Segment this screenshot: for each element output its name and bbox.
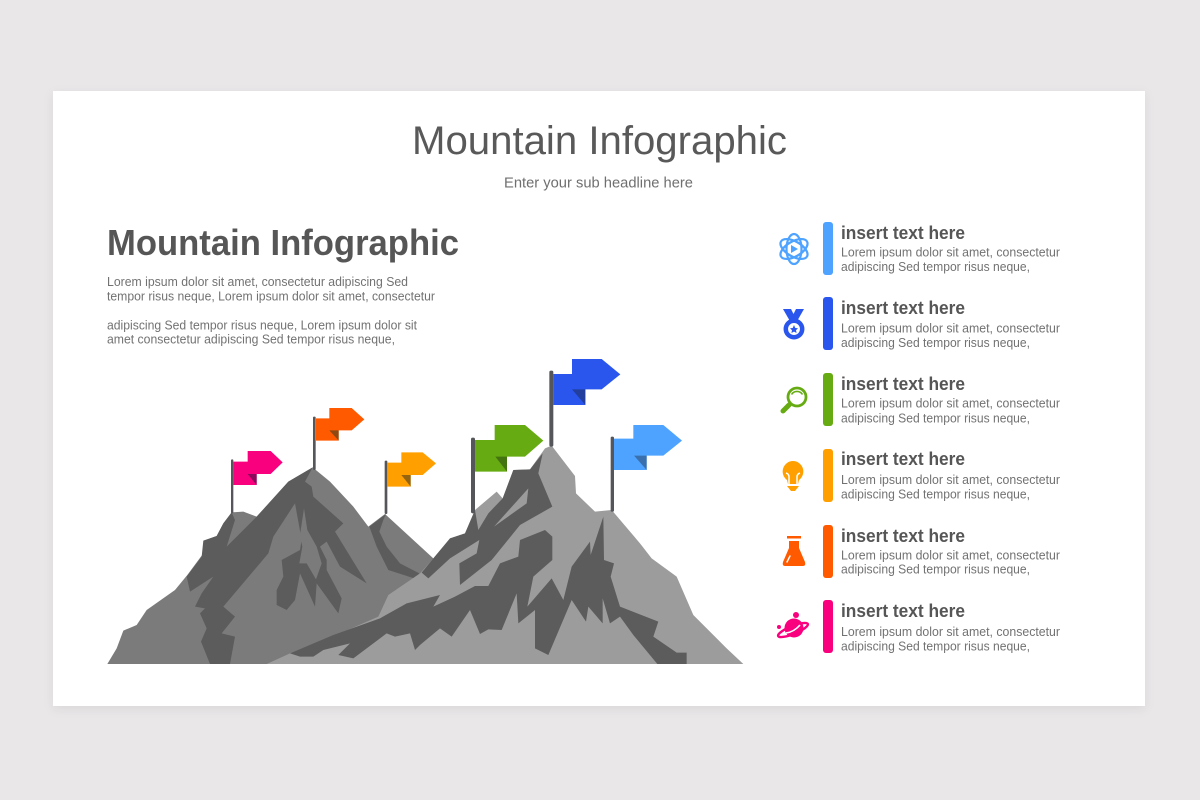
list item 5 — [783, 525, 1060, 578]
text block: left paragraph: Lorem ipsum dolor sit amet, consectetur adipiscing Sed — [107, 275, 408, 289]
item heading: insert text here — [841, 601, 965, 621]
item text — [841, 246, 1060, 274]
flag: light blue — [611, 425, 682, 512]
color bar — [823, 600, 833, 653]
item text: adipiscing Sed tempor risus neque, — [841, 260, 1030, 274]
list item 2 — [783, 297, 1060, 350]
item text: adipiscing Sed tempor risus neque, — [841, 336, 1030, 350]
flag: pink — [231, 451, 283, 513]
item text: adipiscing Sed tempor risus neque, — [841, 488, 1030, 502]
item text — [841, 396, 1060, 426]
item text: Lorem ipsum dolor sit amet, consectetur — [841, 322, 1060, 336]
color bar — [823, 449, 833, 502]
item text: Lorem ipsum dolor sit amet, consectetur — [841, 548, 1060, 562]
item text: Lorem ipsum dolor sit amet, consectetur — [841, 473, 1060, 487]
item heading: insert text here — [841, 374, 965, 394]
illustration: mountains with flags — [107, 359, 743, 664]
icon: flask — [783, 536, 805, 566]
item text — [841, 625, 1060, 654]
heading: left section: Mountain Infographic — [107, 222, 459, 263]
item text: adipiscing Sed tempor risus neque, — [841, 412, 1030, 426]
color bar — [823, 373, 833, 426]
list item 6 — [777, 600, 1060, 654]
text block: left paragraph: adipiscing Sed tempor risus neque, Lorem ipsum dolor sit — [107, 318, 418, 332]
icon: atom — [777, 234, 811, 264]
front mountain — [267, 446, 743, 664]
item heading: insert text here — [841, 526, 965, 546]
title: Mountain Infographic — [412, 119, 787, 163]
list item 4 — [783, 449, 1060, 502]
item heading: insert text here — [841, 298, 965, 318]
icon: planet — [777, 612, 809, 640]
item text — [841, 548, 1060, 576]
item text: Lorem ipsum dolor sit amet, consectetur — [841, 396, 1060, 410]
icon: light bulb — [783, 461, 803, 491]
color bar — [823, 222, 833, 275]
item heading: insert text here — [841, 449, 965, 469]
color bar — [823, 525, 833, 578]
item text: Lorem ipsum dolor sit amet, consectetur — [841, 246, 1060, 260]
item text — [841, 473, 1060, 502]
item heading: insert text here — [841, 223, 965, 243]
text block: left paragraph — [107, 275, 435, 346]
flag: orange — [313, 408, 364, 470]
flag: yellow — [385, 452, 436, 514]
list item 3 — [783, 373, 1060, 426]
item text: Lorem ipsum dolor sit amet, consectetur — [841, 625, 1060, 639]
icon: magnifier — [783, 388, 806, 411]
color bar — [823, 297, 833, 350]
item text — [841, 322, 1060, 350]
text block: left paragraph: amet consectetur adipiscing Sed tempor risus neque, — [107, 332, 395, 346]
item text: adipiscing Sed tempor risus neque, — [841, 640, 1030, 654]
icon: medal — [783, 309, 804, 337]
item text: adipiscing Sed tempor risus neque, — [841, 562, 1030, 576]
list item 1 — [777, 222, 1060, 275]
flag: green — [471, 425, 543, 513]
text block: left paragraph: tempor risus neque, Lorem ipsum dolor sit amet, consectetur — [107, 290, 435, 304]
back mountain range — [107, 467, 447, 664]
panel: white slide card — [53, 91, 1145, 706]
subtitle: Enter your sub headline here — [504, 176, 693, 192]
flag: blue — [549, 359, 620, 447]
